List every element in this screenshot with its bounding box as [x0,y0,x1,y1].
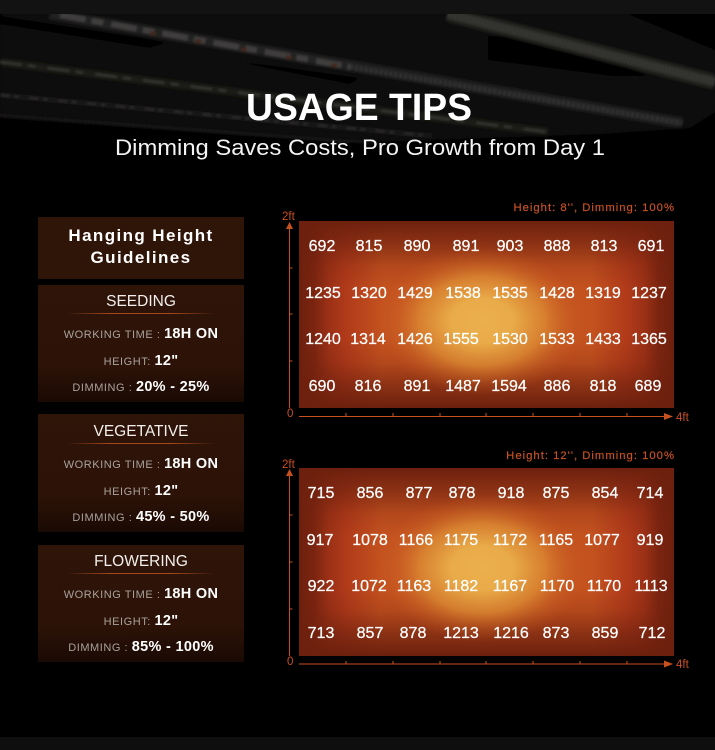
illuminance values: 1213 [443,625,479,642]
illuminance values: 714 [637,485,663,502]
illuminance values: 1538 [445,285,481,302]
illuminance values: 922 [308,578,334,595]
illuminance values: 690 [309,378,335,395]
subtitle: Dimming Saves Costs, Pro Growth from Day 1 [115,135,605,160]
axis labels: 2ft [282,211,296,223]
panel: seeding: HEIGHT: 12" [104,353,178,369]
axis labels: 0 [287,408,293,420]
panel: flowering: FLOWERING [94,553,188,570]
panel: vegetative [38,414,244,532]
panel: flowering [38,545,244,662]
axis labels [282,211,690,424]
illuminance values: 713 [308,625,334,642]
illuminance values: 1165 [539,532,573,549]
illuminance values: 813 [591,238,617,255]
illuminance values: 854 [592,485,618,502]
illuminance values: 891 [453,238,479,255]
panel: vegetative: WORKING TIME : 18H ON [64,456,218,472]
illuminance values: 818 [590,378,616,395]
illuminance values: 888 [544,238,570,255]
illuminance values: 919 [637,532,663,549]
bottom band [0,737,715,750]
illuminance values: 1216 [493,625,529,642]
illuminance values: 857 [357,625,383,642]
illuminance values: 903 [497,238,523,255]
illuminance values: 715 [308,485,334,502]
illuminance values: 918 [498,485,524,502]
axis labels: 2ft [282,459,296,471]
axis labels [282,459,690,671]
panel: flowering: WORKING TIME : 18H ON [64,586,218,602]
chart heading: height 8 inches: Height: 8'', Dimming: 100% [513,202,675,214]
illuminance values: 1429 [397,285,433,302]
illuminance values: 1594 [491,378,527,395]
illuminance values: 1530 [492,331,528,348]
illuminance values: 890 [404,238,430,255]
illuminance values: 1182 [444,578,478,595]
illuminance values: 1166 [399,532,433,549]
panel: vegetative: HEIGHT: 12" [104,483,178,499]
illuminance values: 1320 [351,285,387,302]
axis labels: 0 [287,656,293,668]
panel: seeding: SEEDING [106,293,176,310]
illuminance values: 1426 [397,331,433,348]
panel: vegetative: DIMMING : 45% - 50% [72,509,210,525]
illuminance values: 1113 [634,578,668,595]
illuminance values: 878 [449,485,475,502]
y axis [286,222,293,408]
panel: hanging height guidelines heading: Hanging Height [68,226,214,245]
panel: hanging height guidelines heading [38,217,244,279]
illuminance values: 1172 [493,532,527,549]
panel: hanging height guidelines heading: Guidelines [91,248,191,267]
panel: seeding [38,285,244,402]
illuminance values: 1235 [305,285,341,302]
panel: flowering: DIMMING : 85% - 100% [68,639,214,655]
axis labels: 4ft [676,412,690,424]
title: USAGE TIPS [246,87,472,129]
illuminance values: 1170 [587,578,621,595]
illuminance values: 1078 [352,532,388,549]
illuminance values: 1240 [305,331,341,348]
x axis [299,660,673,668]
illuminance values: 1365 [631,331,667,348]
illuminance values [307,485,668,642]
illuminance values: 1163 [397,578,431,595]
illuminance values: 856 [357,485,383,502]
illuminance values: 689 [635,378,661,395]
illuminance values: 1433 [585,331,621,348]
illuminance values: 1314 [350,331,386,348]
illuminance values [305,238,667,395]
panel: vegetative: VEGETATIVE [93,423,189,440]
chart: heatmap 8 inches [282,211,690,424]
chart: heatmap 12 inches [282,459,690,671]
header photo: LED light bars [0,14,715,145]
illuminance values: 815 [356,238,382,255]
illuminance values: 917 [307,532,333,549]
illuminance values: 1487 [445,378,481,395]
illuminance values: 1319 [585,285,621,302]
axis labels: 4ft [676,659,690,671]
illuminance values: 891 [404,378,430,395]
illuminance values: 816 [355,378,381,395]
panel: flowering: HEIGHT: 12" [104,613,178,629]
illuminance values: 878 [400,625,426,642]
illuminance values: 1535 [492,285,528,302]
illuminance values: 692 [309,238,335,255]
illuminance values: 873 [543,625,569,642]
illuminance values: 1072 [351,578,387,595]
top band [0,0,715,14]
illuminance values: 1167 [493,578,527,595]
illuminance values: 1175 [444,532,478,549]
panel: seeding: DIMMING : 20% - 25% [72,379,210,395]
illuminance values: 1237 [631,285,667,302]
illuminance values: 691 [638,238,664,255]
illuminance values: 1077 [584,532,620,549]
illuminance values: 1428 [539,285,575,302]
illuminance values: 875 [543,485,569,502]
illuminance values: 859 [592,625,618,642]
panel: seeding: WORKING TIME : 18H ON [64,326,218,342]
illuminance values: 877 [406,485,432,502]
illuminance values: 1555 [443,331,479,348]
illuminance values: 712 [639,625,665,642]
illuminance values: 1170 [540,578,574,595]
y axis [286,469,293,656]
x axis [299,413,673,420]
illuminance values: 1533 [539,331,575,348]
chart heading: height 12 inches: Height: 12'', Dimming: 100% [506,450,675,462]
illuminance values: 886 [544,378,570,395]
